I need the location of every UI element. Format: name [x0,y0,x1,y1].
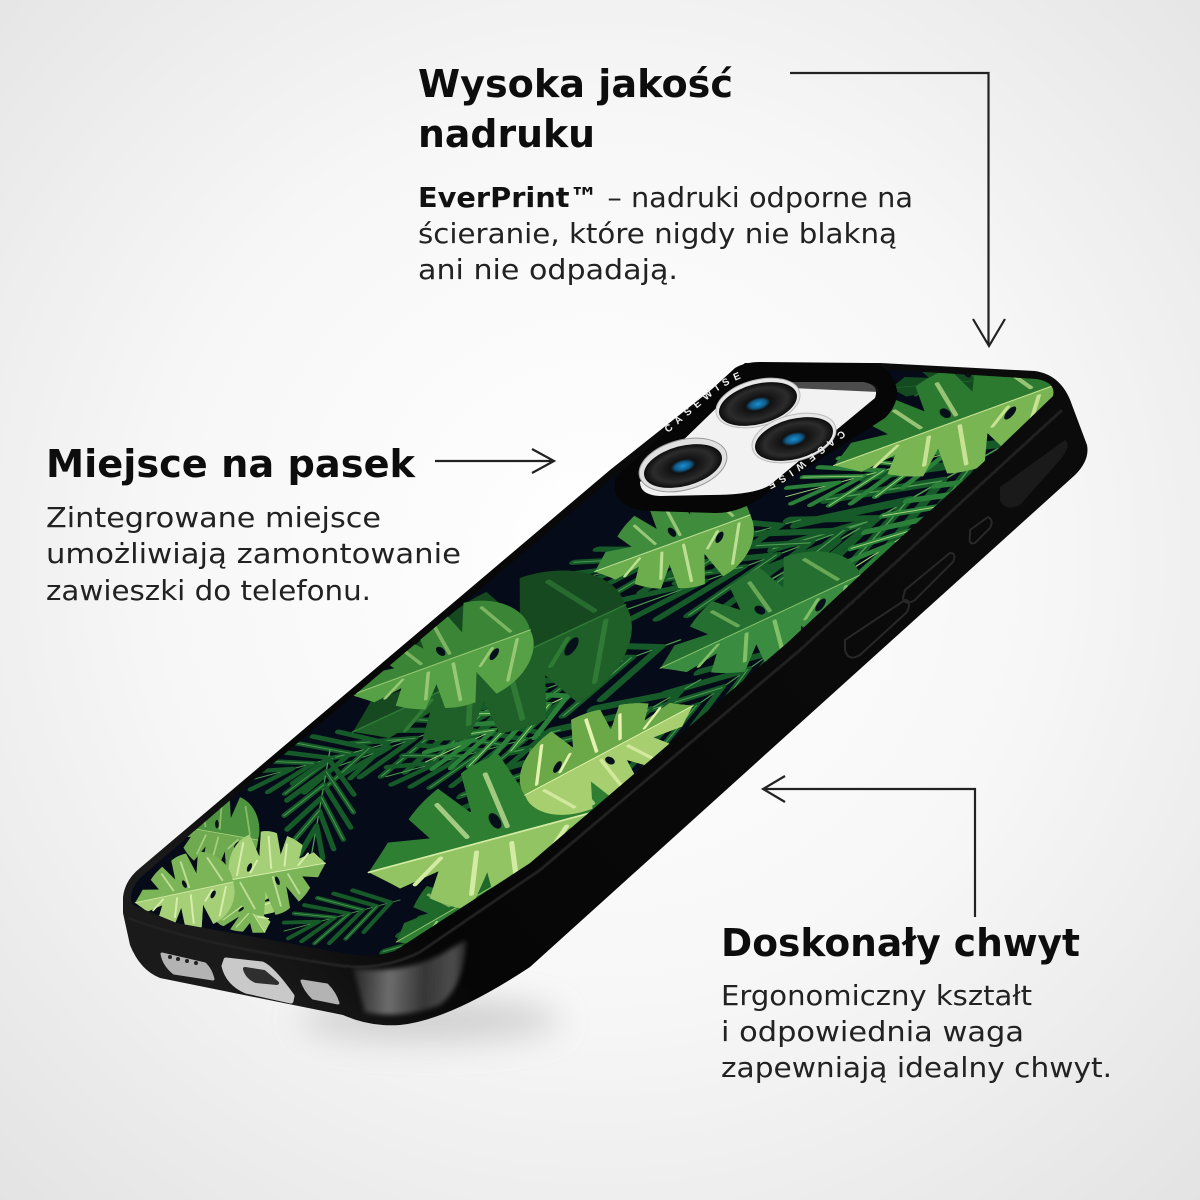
body text [721,980,1112,1084]
body text: ani nie odpadają. [418,254,678,286]
palm fronds: dark layer [239,394,1051,1005]
lens top [711,370,805,436]
body text: Zintegrowane miejsce [46,502,381,534]
leaf: bottom dark [396,860,534,944]
body text [46,502,461,607]
leaf: dark mid backdrop [352,570,632,740]
speaker holes [168,955,330,991]
leaf: top of large leaf [520,703,694,815]
leaf: top right backdrop [896,372,1040,396]
leaf: under camera [594,506,754,589]
body text: zawieszki do telefonu. [46,575,371,607]
phone case with tropical print [123,362,1088,1026]
leaf: top right [833,372,1054,476]
callout: grip [721,921,1112,1084]
body text: i odpowiednia waga [721,1016,1024,1048]
arrow: to strap slot [435,449,554,473]
heading: nadruku [418,112,595,156]
callout: strap slot [46,442,461,607]
body text [418,182,913,286]
lens right [747,405,841,471]
body text: umożliwiają zamontowanie [46,538,461,570]
speaker right [302,981,338,1003]
arrow: to grip [763,776,975,917]
heading: Miejsce na pasek [46,442,416,486]
side buttons [845,517,992,658]
phone shadow [300,998,560,1042]
ring lettering: CASEWISE [665,372,741,432]
camera glass [640,382,876,496]
ring lettering: CASEWISE [770,432,845,490]
usb port [224,960,292,1001]
heading: Wysoka jakość [418,62,733,106]
speaker left [162,954,213,979]
print area [131,370,1054,955]
camera module [615,362,898,513]
leaf: large bottom centre [368,748,616,908]
case body [123,363,1088,1025]
leaf: bottom left [134,831,326,933]
body text: ścieranie, które nigdy nie blakną [418,218,897,250]
palm fronds: brighter right [415,427,1025,785]
body text: Ergonomiczny kształt [721,980,1032,1012]
leaf: palm leaf centre right [660,551,861,673]
camera ring [615,362,897,513]
ring lettering [665,372,845,490]
corner sheen [353,940,466,1015]
lens left [633,429,733,501]
case rim [128,410,1062,967]
heading [418,62,733,156]
leaf: far left [184,797,260,869]
body text: zapewniają idealny chwyt. [721,1052,1112,1084]
callout: print quality [418,62,913,286]
heading: Doskonały chwyt [721,921,1080,965]
arrow: to print [790,73,1005,346]
leaf: left centre [354,600,534,710]
mute switch [1000,440,1068,508]
body text: EverPrint™ – nadruki odporne na [418,182,913,214]
